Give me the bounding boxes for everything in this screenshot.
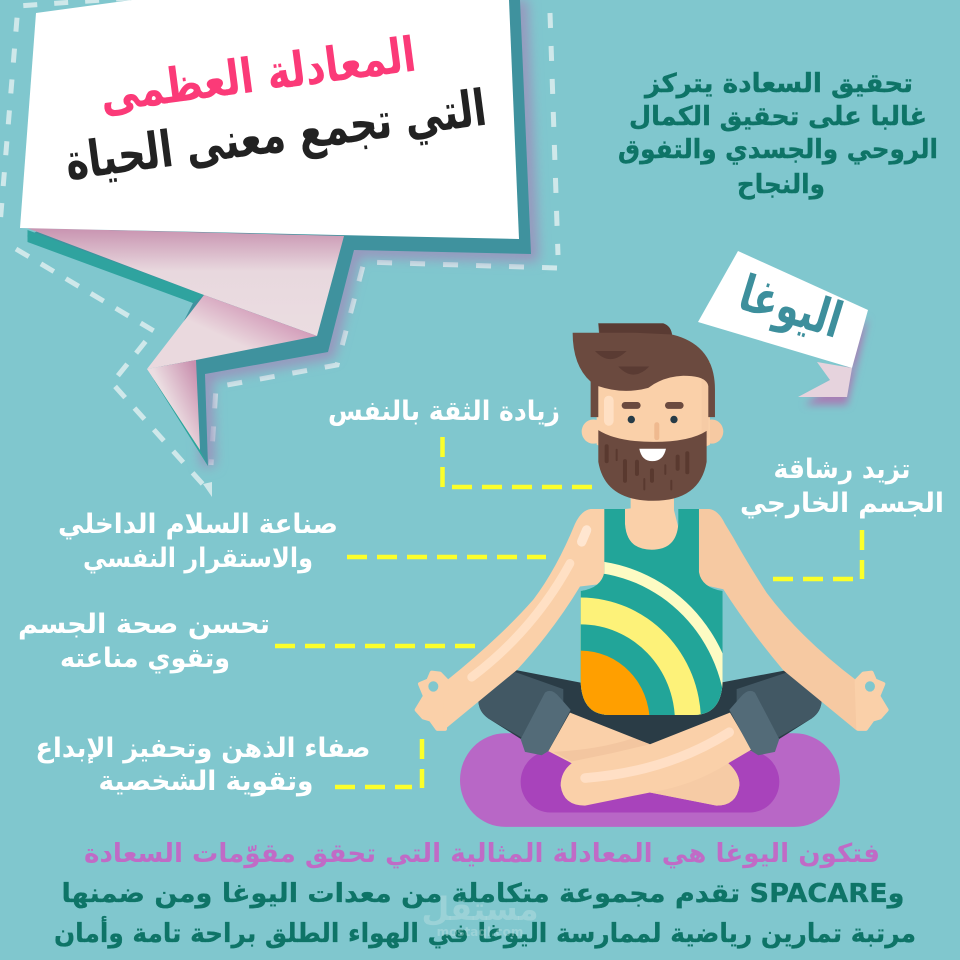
benefit: inner peace: والاستقرار النفسي [83,543,313,574]
intro paragraph: غالبا على تحقيق الكمال [629,102,927,132]
benefit: health and immunity: وتقوي مناعته [60,643,230,674]
title line 2: التي تجمع معنى الحياة [62,79,490,193]
intro paragraph [618,69,938,200]
yoga tag text: اليوغا [732,264,849,351]
watermark: مستقل [421,890,539,928]
hair [573,323,715,417]
conclusion purple line: فتكون اليوغا هي المعادلة المثالية التي تحقق مقوّمات السعادة [84,839,880,869]
yellow connector lines [275,437,862,788]
tank top [580,509,722,715]
yoga tag [698,251,868,405]
watermark: mostaql.com [437,925,523,939]
title ribbon [20,0,531,466]
shorts [478,669,822,751]
benefit: agility: الجسم الخارجي [740,488,944,519]
eyebrows and eyes [622,402,641,409]
mouth [639,449,666,461]
title panel [20,0,519,239]
shorts cuffs [521,691,571,755]
stitched dashed outline around title ribbon [0,0,558,497]
beard [598,430,707,501]
left arm [417,509,607,730]
right arm [693,509,887,730]
benefit: agility [740,454,944,519]
legs [548,713,752,806]
mat [460,733,840,827]
benefit: inner peace [58,509,338,574]
yoga figure illustration [417,323,887,884]
intro paragraph: تحقيق السعادة يتركز [643,69,913,99]
title line 1: المعادلة العظمى [97,27,419,124]
benefit: self confidence: زيادة الثقة بالنفس [328,396,560,427]
intro paragraph: الروحي والجسدي والتفوق [618,135,938,165]
benefit: inner peace: صناعة السلام الداخلي [58,509,338,540]
head [573,323,723,501]
conclusion teal text: مرتبة تمارين رياضية لممارسة اليوغا في الهواء الطلق براحة تامة وأمان [54,916,916,949]
neck [625,496,678,551]
conclusion teal text [54,879,916,949]
benefit: clarity and creativity [36,733,370,797]
benefit: health and immunity: تحسن صحة الجسم [18,609,270,640]
benefit: agility: تزيد رشاقة [774,454,910,485]
benefit: clarity and creativity: وتقوية الشخصية [98,766,314,797]
benefit: health and immunity [18,609,270,674]
intro paragraph: والنجاح [737,170,825,200]
benefit: clarity and creativity: صفاء الذهن وتحفيز الإبداع [36,733,370,764]
conclusion teal text: وSPACARE تقدم مجموعة متكاملة من معدات اليوغا ومن ضمنها [62,879,904,909]
